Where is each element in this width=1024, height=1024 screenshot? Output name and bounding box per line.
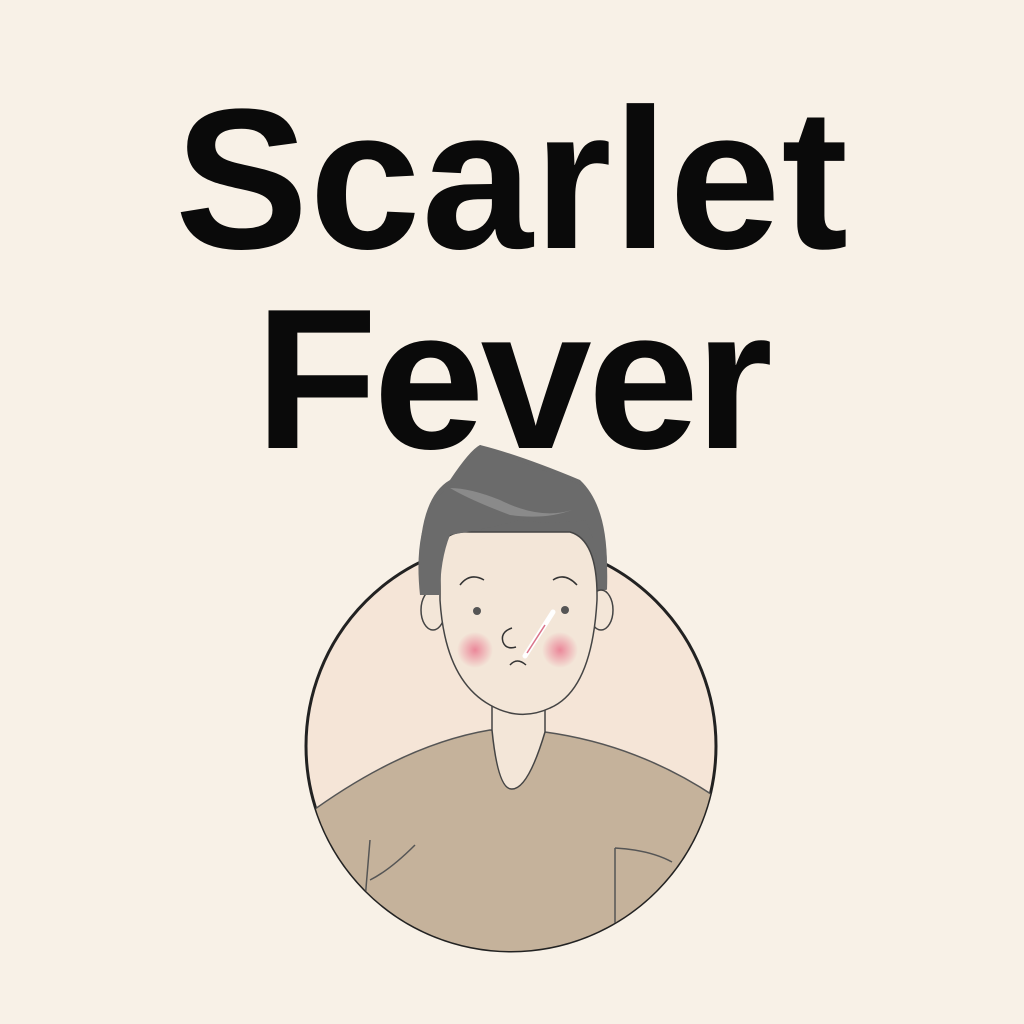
hair top [418,445,607,595]
hair back [419,445,607,590]
illustration: sick man in circle [304,445,718,952]
face [440,532,597,714]
shirt [300,730,720,960]
title: Scarlet [175,68,849,291]
title: Fever [255,268,769,491]
ears [421,590,445,630]
neck [492,700,545,789]
title [175,68,849,491]
circle background [306,541,716,951]
eyebrows, eyes, nose, mouth [460,577,577,585]
cheeks [457,632,493,668]
thermometer [525,612,553,656]
